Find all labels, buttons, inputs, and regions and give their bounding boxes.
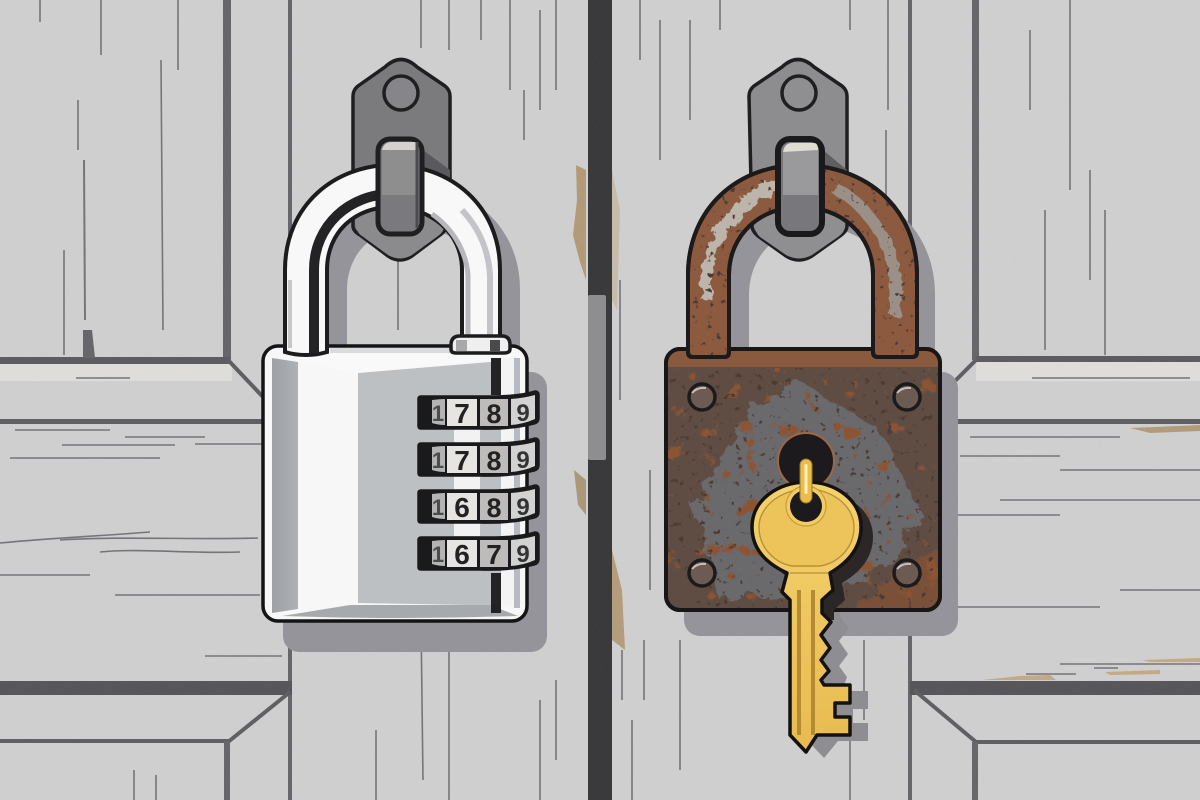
- combination dial row 3: 1: [432, 495, 444, 520]
- keyhole: [778, 433, 834, 489]
- steel padlock body: [263, 346, 527, 621]
- bands between dials: [454, 428, 480, 536]
- rivet bottom left: [689, 560, 715, 586]
- steel shackle: [285, 165, 500, 355]
- hasp link: left: [378, 139, 422, 234]
- combination dial row 1: 1: [432, 401, 444, 426]
- rivet top right: [894, 384, 920, 410]
- hasp link: right: [778, 139, 822, 234]
- rusty shackle: [685, 160, 920, 360]
- stripe right lilac: [514, 358, 520, 608]
- door wear scratches: [573, 165, 1200, 680]
- left door panels: [0, 0, 292, 800]
- top bevel: [298, 353, 515, 373]
- key hole: [786, 486, 826, 526]
- combination dial row 2: [418, 438, 539, 476]
- golden key: [752, 459, 861, 752]
- dark specks: [666, 368, 940, 610]
- key shadow on door: [808, 606, 868, 758]
- stripe over dials: [491, 358, 501, 395]
- bottom bevel: [282, 605, 518, 618]
- combination dial row 3: 6: [454, 492, 470, 523]
- rusty padlock body: [666, 349, 942, 612]
- centre gap between doors: [588, 0, 612, 800]
- hasp: right: [749, 60, 847, 260]
- top strip: [330, 348, 500, 357]
- combination dial row 2: 7: [454, 445, 470, 476]
- stripe right white: [501, 358, 514, 606]
- left side shade: [272, 358, 298, 613]
- grey worn metal centre: [695, 375, 925, 600]
- combination dial row 4: [418, 532, 539, 570]
- combination padlock: shadow: [283, 185, 547, 652]
- front grey panel: [358, 362, 520, 606]
- stripe under dials: [491, 573, 501, 613]
- worn top edge: [672, 365, 932, 369]
- combination dial row 2: 8: [486, 446, 502, 476]
- blade grooves: [799, 590, 813, 735]
- rust patches: [666, 368, 940, 610]
- combination dial row 1: [418, 391, 539, 429]
- combination dial row 4: 7: [486, 539, 502, 570]
- rust top band: [668, 351, 938, 367]
- right door panels: [908, 0, 1200, 800]
- worn metal right: [835, 188, 895, 315]
- key shadow on body: [780, 504, 873, 620]
- combination dial row 1: 8: [486, 399, 502, 429]
- worn metal left lower: [700, 290, 712, 328]
- key head rim: [759, 489, 854, 566]
- key ring: [800, 459, 812, 503]
- rusty padlock: shadow: [684, 185, 958, 636]
- combination dial row 4: 6: [454, 539, 470, 570]
- combination dial row 3: 9: [516, 494, 530, 521]
- combination dial row 2: 9: [516, 447, 530, 474]
- collar of shackle: [451, 336, 510, 353]
- combination dial row 2: 1: [432, 448, 444, 473]
- worn metal left: [707, 185, 780, 300]
- ring highlight: [804, 464, 808, 494]
- combination dial row 3: [418, 485, 539, 523]
- neck line: [790, 572, 828, 574]
- combination dial row 4: 9: [516, 541, 530, 568]
- combination dial row 1: 7: [454, 398, 470, 429]
- combination dial row 1: 9: [516, 400, 530, 427]
- rust bottom right edge: [856, 548, 938, 608]
- combination dial row 4: 1: [432, 542, 444, 567]
- rivet top left: [689, 384, 715, 410]
- hasp: left: [353, 60, 450, 260]
- combination dial row 3: 8: [486, 493, 502, 523]
- rivet bottom right: [894, 560, 920, 586]
